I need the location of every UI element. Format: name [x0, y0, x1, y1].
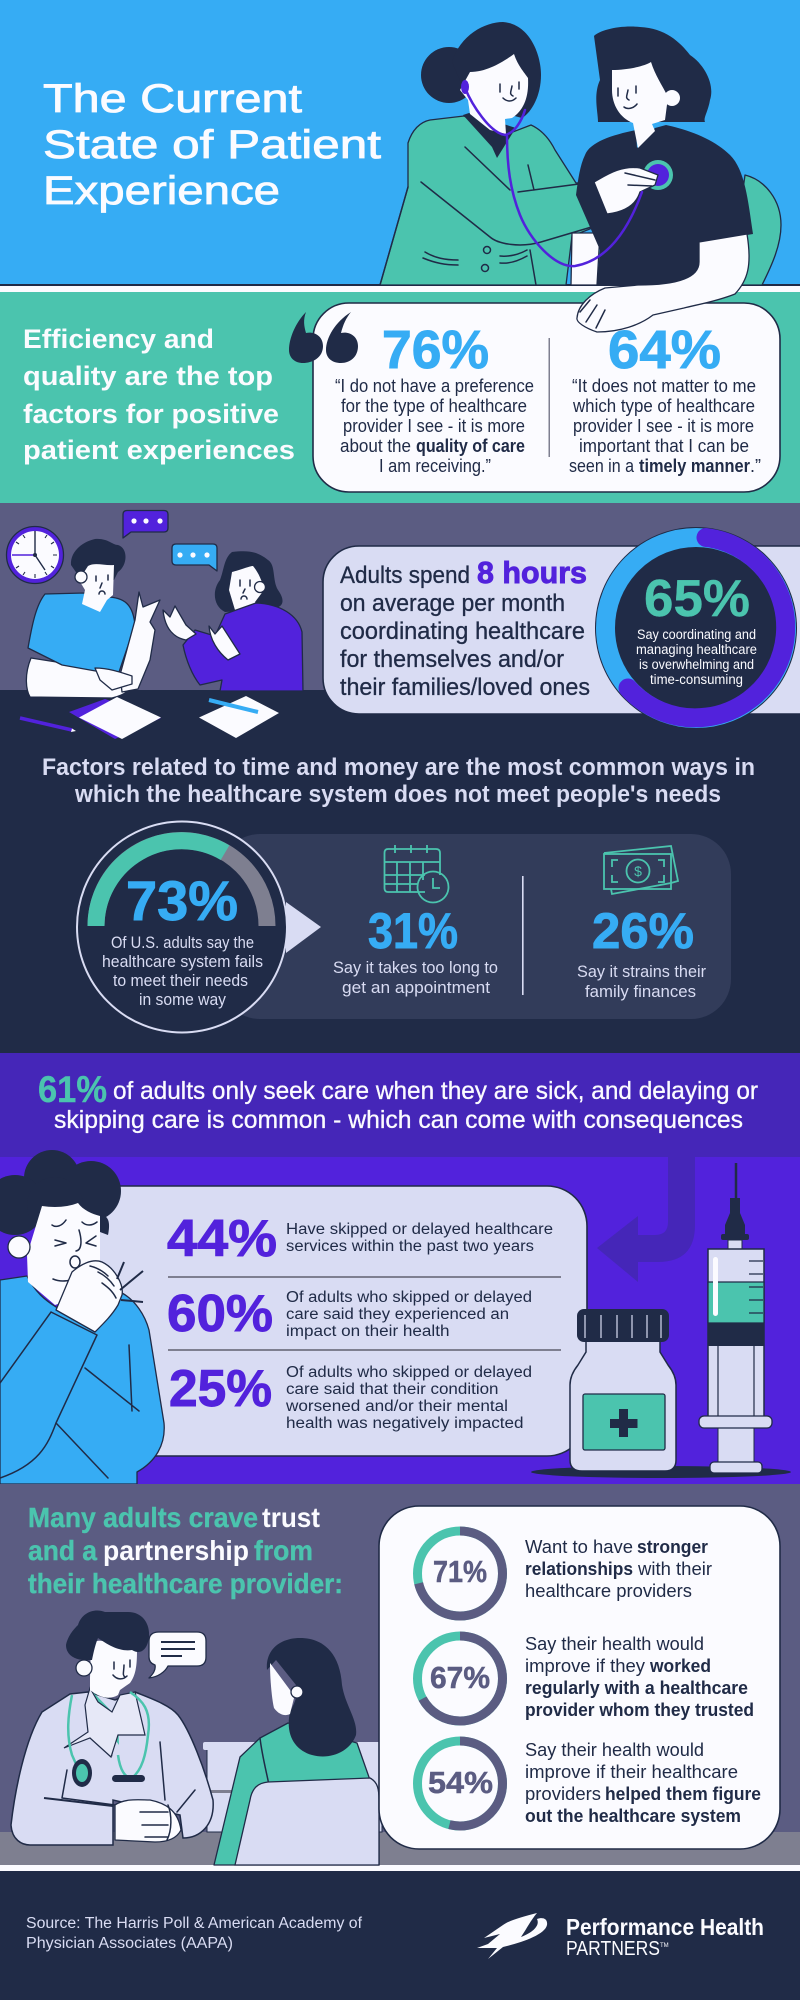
illustration: doctor: [11, 1611, 213, 1845]
heading: time and money: Factors related to time and money are the most common ways in: [42, 754, 755, 781]
card: 8 hours: for themselves and/or: [340, 646, 564, 673]
icon: speech bubble blue: [172, 544, 217, 571]
stat: 26 percent: Say it strains their: [577, 962, 706, 981]
chart: 73 percent gauge: 73%: [126, 869, 238, 932]
title: State of Patient: [43, 123, 381, 167]
chart: 73 percent gauge: Of U.S. adults say the: [111, 934, 254, 952]
stat: 44 percent: [167, 1210, 553, 1268]
stat: 64 percent: important that I can be: [579, 436, 749, 456]
chart: 65 percent donut: is overwhelming and: [639, 657, 754, 672]
title: The Current: [43, 77, 302, 121]
stat: 25 percent: health was negatively impacted: [286, 1415, 524, 1432]
stat: 25 percent: [169, 1360, 532, 1432]
stat: 31 percent: get an appointment: [342, 978, 490, 997]
stat: 67 percent: worked: [649, 1655, 711, 1676]
stat: 64 percent: seen in a: [569, 456, 635, 476]
stat: 67 percent: [418, 1633, 754, 1721]
stat: 64 percent: [569, 320, 761, 476]
stat: 54 percent: 54%: [428, 1765, 493, 1800]
stat: 71 percent: healthcare providers: [525, 1580, 692, 1601]
chart: 73 percent gauge: to meet their needs: [113, 972, 248, 990]
heading: trust: from: [254, 1535, 313, 1566]
title: Experience: [43, 169, 280, 213]
illustration: desk: [203, 1742, 383, 1832]
stat: 71 percent: relationships: [525, 1558, 633, 1579]
panel: trust and partnership: [0, 1484, 800, 1871]
icon: clock: [6, 526, 64, 584]
icon: calendar with clock: [384, 845, 448, 902]
chart: 65 percent donut: Say coordinating and: [637, 627, 756, 642]
stat: 26 percent: 26%: [592, 903, 694, 959]
stat: 44 percent: Have skipped or delayed healthcare: [286, 1221, 553, 1238]
stat: 67 percent: 67%: [430, 1660, 490, 1695]
icon: banknotes: [604, 846, 678, 894]
heading: 61 percent: 61%: [38, 1069, 107, 1110]
stat: 25 percent: 25%: [169, 1360, 272, 1418]
stat: 31 percent: Say it takes too long to: [333, 958, 498, 977]
chart: 73 percent gauge: healthcare system fails: [102, 953, 263, 971]
heading: time and money: which the healthcare system does not meet people's needs: [74, 781, 721, 808]
stat: 31 percent: 31%: [368, 903, 458, 959]
stat: 60 percent: 60%: [167, 1285, 273, 1343]
card: 8 hours: Adults spend: [340, 562, 470, 589]
stat: 76 percent: for the type of healthcare: [341, 396, 527, 416]
panel: time and money: [0, 745, 800, 1053]
stat: 67 percent: provider whom they trusted: [525, 1699, 754, 1720]
panel: delayed care: [0, 1053, 800, 1484]
stat: 44 percent: services within the past two years: [286, 1238, 534, 1255]
arrow: pointer: [286, 902, 321, 953]
panel: efficiency and quality: [0, 234, 800, 504]
stat: 31 percent: [333, 903, 498, 997]
papers and pencils: [20, 696, 279, 739]
panel: coordinating healthcare: [0, 503, 800, 800]
stat: 25 percent: care said that their condition: [286, 1381, 498, 1398]
stat: 71 percent: [418, 1531, 712, 1616]
icon: quotation marks: [289, 312, 358, 363]
heading: trust: partnership: [103, 1535, 249, 1566]
illustration: patient from behind: [214, 1638, 379, 1865]
illustration: syringe: [699, 1163, 772, 1473]
stat: 54 percent: improve if their healthcare: [525, 1761, 738, 1782]
card: 8 hours: [323, 546, 800, 714]
chart: 65 percent donut: time-consuming: [650, 672, 743, 687]
heading: efficiency and quality: [23, 324, 295, 465]
illustration: coughing man: [0, 1150, 164, 1484]
chart: 73 percent gauge: [77, 822, 287, 1032]
heading: 61 percent: skipping care is common - which can come with consequences: [54, 1106, 743, 1134]
heading: 61 percent: [38, 1069, 758, 1134]
heading: efficiency and quality: Efficiency and: [23, 324, 214, 354]
title: [43, 77, 381, 213]
chart: 65 percent donut: 65%: [644, 570, 750, 628]
logo: Performance Health Partners: TM: [660, 1943, 669, 1949]
source note: Source: The Harris Poll & American Academy of: [26, 1915, 363, 1932]
woman: [163, 551, 303, 691]
logo: Performance Health Partners: PARTNERS: [566, 1938, 660, 1960]
stat: 54 percent: providers: [525, 1783, 601, 1804]
heading: trust: trust: [262, 1502, 320, 1533]
stat: 76 percent: 76%: [382, 320, 489, 380]
heading: efficiency and quality: factors for positive: [23, 399, 279, 429]
heading: trust: and a: [28, 1535, 97, 1566]
heading: efficiency and quality: patient experiences: [23, 435, 295, 465]
stat: 76 percent: quality of care: [416, 436, 525, 456]
chart: 65 percent donut: [595, 527, 797, 729]
stat: 25 percent: worsened and/or their mental: [285, 1398, 508, 1415]
stat: 76 percent: [335, 320, 534, 476]
stat: 64 percent: provider I see - it is more: [573, 416, 754, 436]
icon: speech bubble purple: [123, 510, 168, 538]
heading: trust: [28, 1502, 343, 1599]
stat: 71 percent: 71%: [433, 1554, 487, 1589]
icon: speech bubble: [149, 1632, 206, 1678]
stat: 54 percent: Say their health would: [525, 1739, 704, 1760]
stat: 67 percent: improve if they: [525, 1655, 646, 1676]
stat: 76 percent: about the: [340, 436, 411, 456]
chart: 65 percent donut: managing healthcare: [636, 642, 757, 657]
illustration: patient arm and hand over card: [577, 234, 749, 332]
stat: 60 percent: Of adults who skipped or delayed: [286, 1289, 532, 1306]
illustration: medicine bottle: [570, 1309, 676, 1471]
stat: 71 percent: stronger: [637, 1536, 708, 1557]
stat: 64 percent: which type of healthcare: [572, 396, 755, 416]
stat: 64 percent: timely manner: [639, 456, 750, 476]
stat: 71 percent: Want to have: [525, 1536, 633, 1557]
illustration: two people talking: [6, 510, 303, 739]
heading: trust: Many adults crave: [28, 1502, 258, 1533]
stat: 64 percent: “It does not matter to me: [572, 376, 756, 396]
stat: 54 percent: out the healthcare system: [525, 1805, 741, 1826]
card: 8 hours: coordinating healthcare: [340, 618, 585, 645]
heading: time and money: [42, 754, 755, 808]
stat: 54 percent: helped them figure: [605, 1783, 761, 1804]
stat: 67 percent: Say their health would: [525, 1633, 704, 1654]
stat: 26 percent: family finances: [585, 982, 696, 1001]
stat: 76 percent: I am receiving.”: [379, 456, 491, 476]
stat: 76 percent: provider I see - it is more: [343, 416, 525, 436]
card: 8 hours: 8 hours: [477, 555, 587, 590]
stat: 54 percent: [418, 1739, 761, 1826]
stat: 44 percent: 44%: [167, 1210, 277, 1268]
arrow: return arrow: [597, 1157, 695, 1282]
logo: Performance Health Partners: Performance Health: [566, 1914, 764, 1940]
panel: hero header: [0, 0, 800, 292]
illustration: doctor examining patient: [380, 22, 781, 285]
stat: 64 percent: .”: [750, 456, 761, 476]
card: 8 hours: on average per month: [340, 590, 565, 617]
stat: 76 percent: “I do not have a preference: [335, 376, 534, 396]
card: quotes: [289, 303, 780, 492]
source note: Physician Associates (AAPA): [26, 1935, 233, 1952]
heading: trust: their healthcare provider:: [28, 1568, 343, 1599]
stat: 60 percent: impact on their health: [286, 1323, 450, 1340]
card: trust stats: [379, 1506, 780, 1849]
card: 8 hours: their families/loved ones: [340, 674, 590, 701]
panel: footer: [0, 1871, 800, 2000]
card: skipped care stats: [60, 1186, 587, 1456]
icon: banknotes: $: [634, 863, 642, 879]
chart: 73 percent gauge: in some way: [139, 991, 227, 1009]
stat: 60 percent: care said they experienced an: [286, 1306, 509, 1323]
heading: efficiency and quality: quality are the top: [23, 361, 273, 391]
stat: 64 percent: 64%: [608, 320, 721, 380]
heading: 61 percent: of adults only seek care when they are sick, and delaying or: [113, 1077, 758, 1105]
stat: 25 percent: Of adults who skipped or delayed: [286, 1364, 532, 1381]
stat: 26 percent: [577, 903, 706, 1001]
logo: Performance Health Partners: [477, 1913, 764, 1960]
source note: [26, 1915, 363, 1952]
stat: 67 percent: regularly with a healthcare: [525, 1677, 748, 1698]
stat: 71 percent: with their: [637, 1558, 712, 1579]
man: [26, 539, 160, 698]
stat: 60 percent: [167, 1285, 532, 1343]
